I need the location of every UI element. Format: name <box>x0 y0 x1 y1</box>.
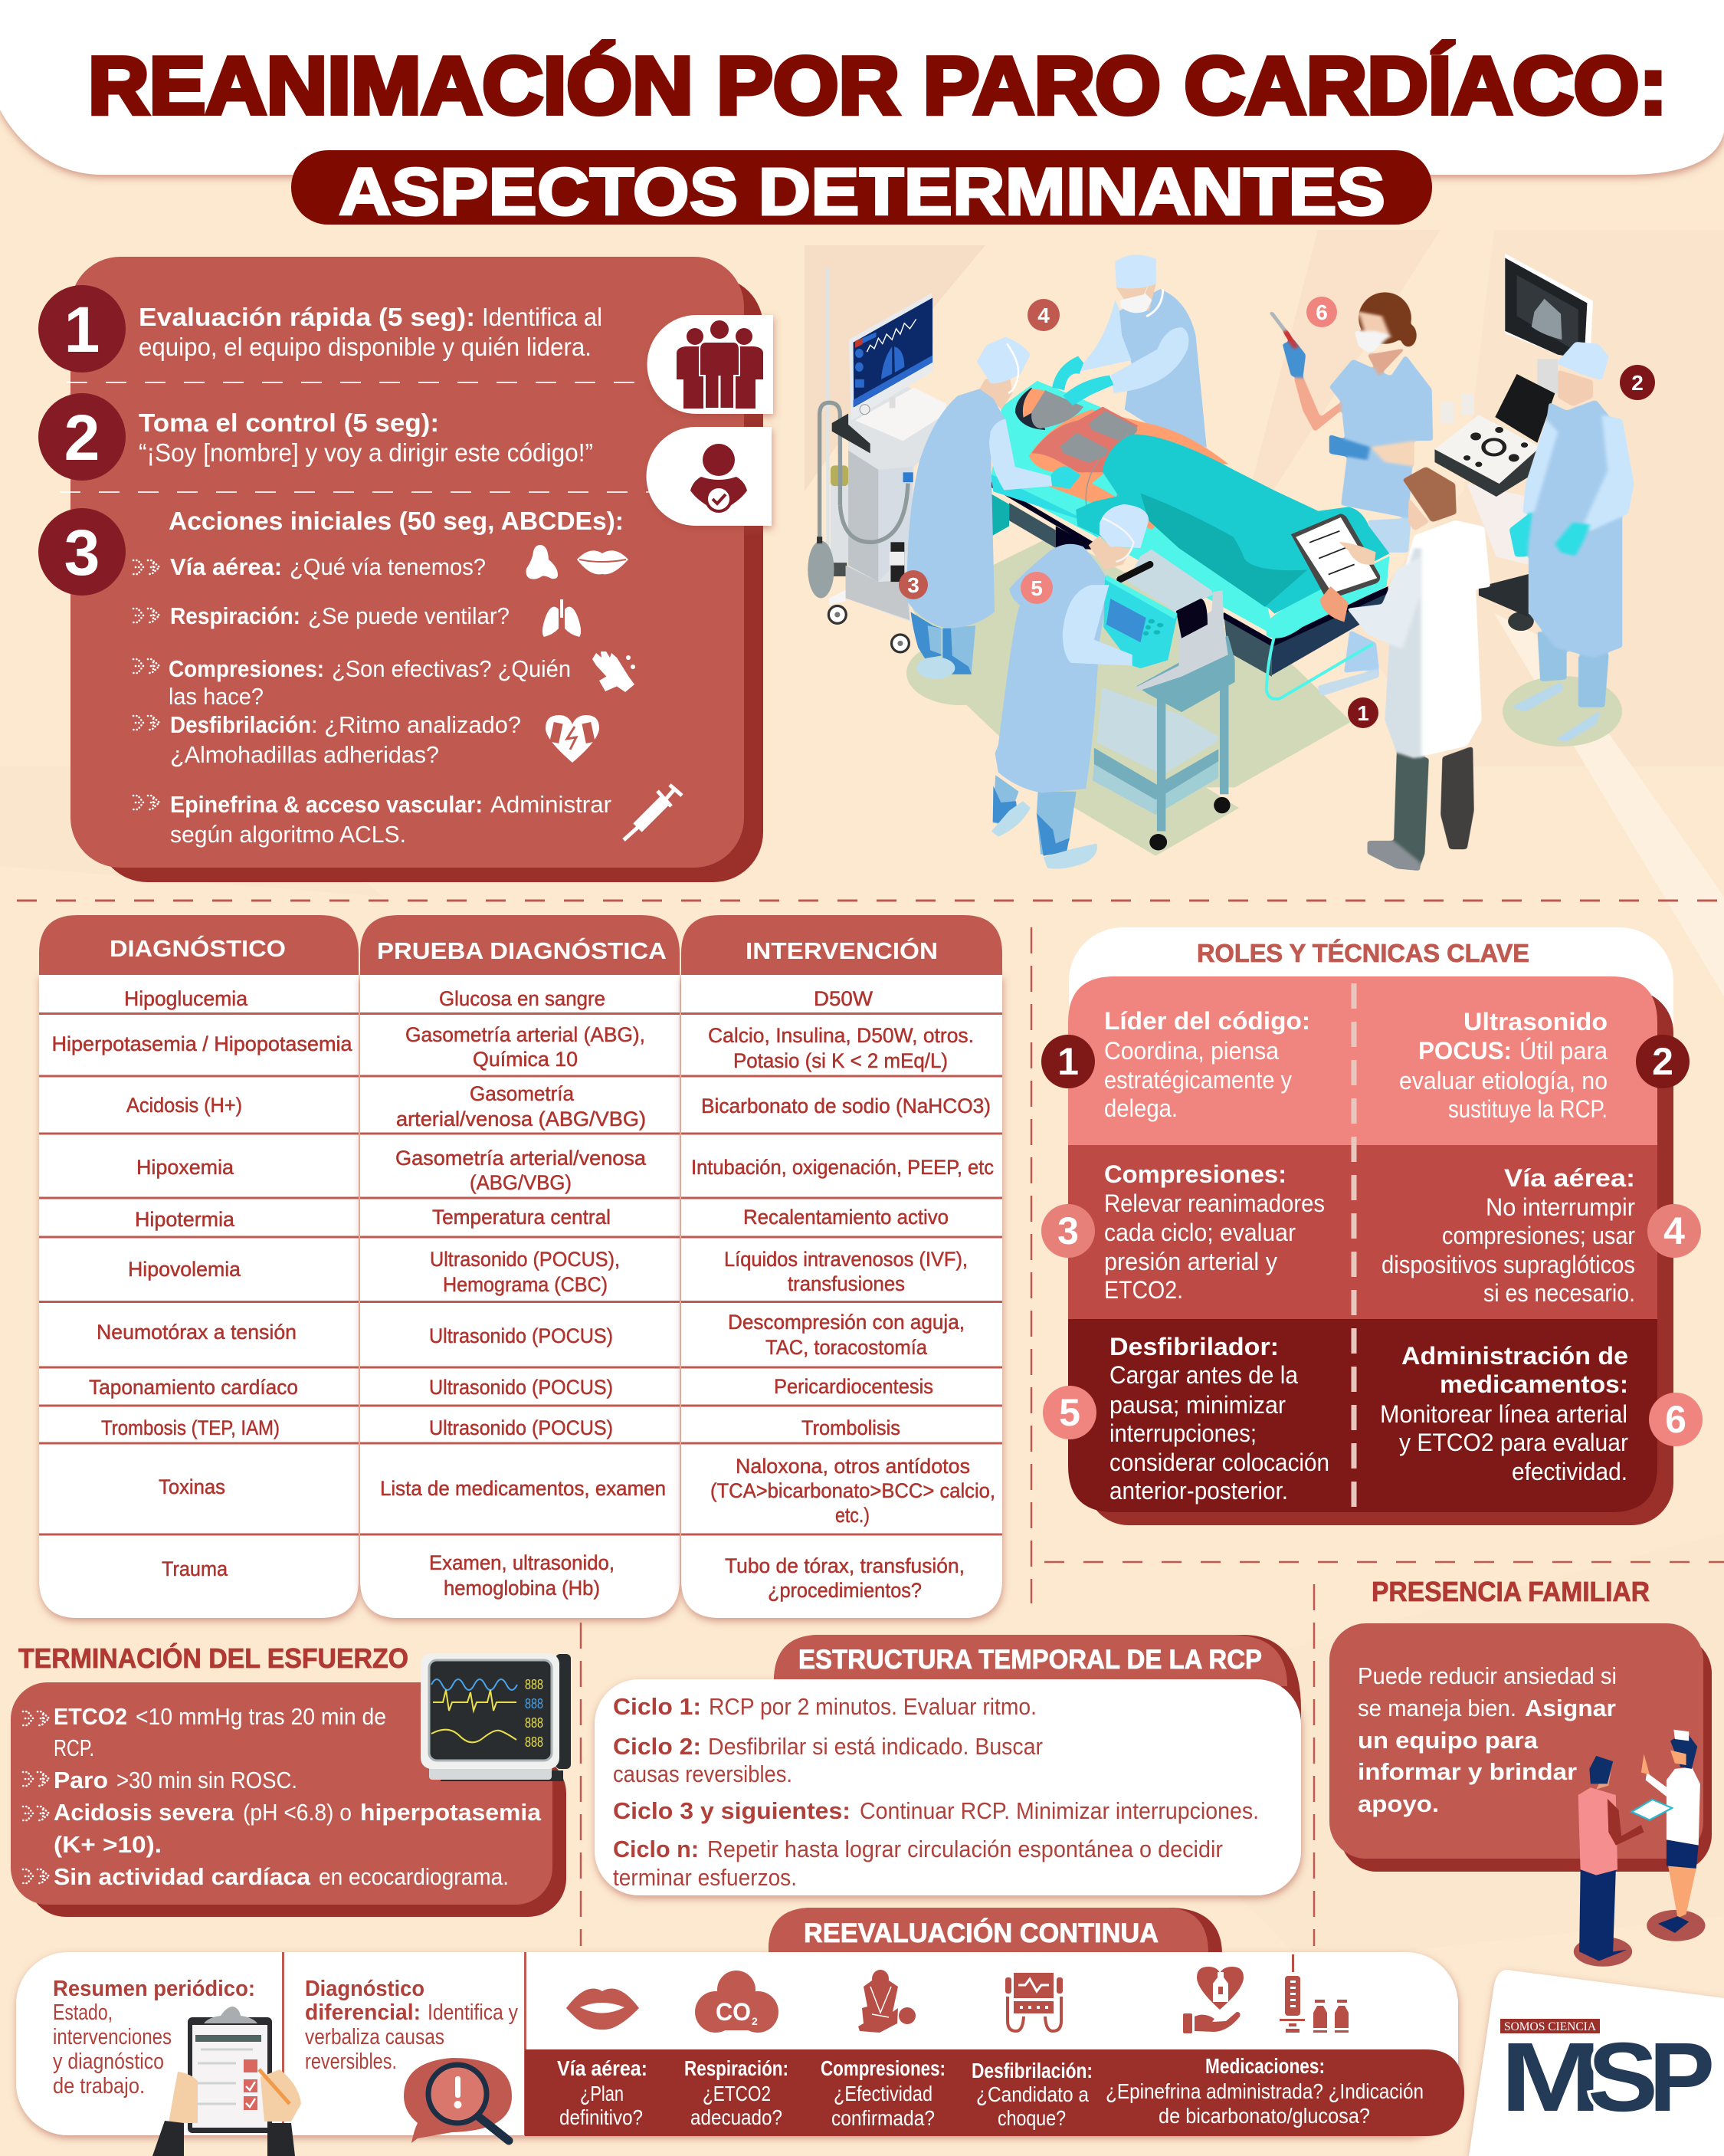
diagnóstico diferencial text: reversibles. <box>305 2049 397 2074</box>
band: compresiones: ¿Efectividad <box>834 2082 932 2105</box>
table cell text: Hipotermia <box>135 1208 235 1231</box>
cycle list: causas reversibles. <box>613 1761 792 1787</box>
table cell text: hemoglobina (Hb) <box>444 1577 600 1600</box>
band: compresiones: confirmada? <box>831 2106 935 2130</box>
termination criteria text <box>23 1703 542 1890</box>
person 4 body: airway <box>1081 254 1207 448</box>
band: vía aérea: ¿Plan <box>580 2082 624 2105</box>
table cell text: Glucosa en sangre <box>439 987 605 1010</box>
ultrasound machine <box>1434 254 1593 631</box>
table cell text: Gasometría arterial (ABG), <box>405 1023 645 1046</box>
cycle list: Repetir hasta lograr circulación espontánea o decidir <box>707 1836 1223 1862</box>
list: vía aérea: Vía aérea: <box>170 553 282 580</box>
cart shelves <box>1093 684 1231 850</box>
table cell text: Taponamiento cardíaco <box>89 1376 298 1399</box>
person 2: ultrasound <box>1509 342 1634 742</box>
step 1 badge: 1 <box>64 294 100 366</box>
band: desfibrilación: Desfibrilación: <box>972 2059 1093 2082</box>
cycle list: Ciclo n: <box>613 1836 699 1862</box>
panel: terminación del esfuerzo <box>11 1653 571 1917</box>
resumen periódico text: Resumen periódico: <box>53 1977 255 2001</box>
role 5: anterior-posterior. <box>1109 1477 1288 1505</box>
icon: CO2 cloud: CO <box>716 1998 751 2026</box>
diagnóstico diferencial text: Identifica y <box>428 2000 518 2025</box>
person 3: compressions <box>907 337 1081 679</box>
termination criteria text: >30 min sin ROSC. <box>116 1767 297 1793</box>
person 4 hands <box>1052 327 1188 405</box>
band: medicaciones: ¿Epinefrina administrada? ¿Indicación <box>1106 2079 1424 2103</box>
diagnóstico diferencial text <box>305 1977 518 2074</box>
icon: defibrillator <box>1005 1973 1063 2031</box>
table cell text: ¿procedimientos? <box>768 1579 922 1602</box>
table cell text: transfusiones <box>788 1272 905 1295</box>
illustration number badges <box>899 297 1655 728</box>
role 6: Administración de <box>1401 1342 1628 1370</box>
panel: initial steps <box>38 257 773 882</box>
role 3 <box>1041 1160 1325 1304</box>
tab: reevaluación continua <box>769 1908 1222 1954</box>
role 3: 3 <box>1057 1209 1079 1252</box>
icon: nose <box>526 545 558 579</box>
role 6: y ETCO2 para evaluar <box>1399 1429 1628 1456</box>
table cell text: Química 10 <box>473 1048 578 1071</box>
band: respiración: ¿ETCO2 <box>703 2082 771 2105</box>
role 1: 1 <box>1057 1040 1079 1083</box>
table cell text: Hipovolemia <box>128 1258 241 1281</box>
table cell text: Ultrasonido (POCUS), <box>430 1248 620 1271</box>
table cell text: Hipoxemia <box>136 1156 234 1179</box>
column: diagnóstico: DIAGNÓSTICO <box>110 934 286 962</box>
band: vía aérea: definitivo? <box>559 2105 643 2129</box>
role 4: si es necesario. <box>1483 1279 1635 1307</box>
icon: lungs <box>542 599 581 637</box>
table cell text: Bicarbonato de sodio (NaHCO3) <box>701 1094 991 1117</box>
step 2 text: “¡Soy [nombre] y voy a dirigir este código!” <box>139 438 593 467</box>
list: epinefrina: Administrar <box>490 791 611 818</box>
table cell text: Naloxona, otros antídotos <box>736 1455 970 1478</box>
icon: team tab <box>647 315 773 414</box>
cycle list: Ciclo 1: <box>613 1693 701 1720</box>
person 5 gown <box>995 544 1109 793</box>
band: medicaciones: de bicarbonato/glucosa? <box>1159 2104 1370 2128</box>
list: compresiones: las hace? <box>169 683 264 710</box>
illustration: doctor and relative <box>1574 1730 1705 1967</box>
list: epinefrina <box>133 791 611 848</box>
table cell text: Lista de medicamentos, examen <box>380 1477 666 1500</box>
table cell text: Recalentamiento activo <box>743 1206 949 1229</box>
role 4: 4 <box>1663 1209 1685 1252</box>
role 6: medicamentos: <box>1440 1370 1628 1398</box>
table cell text: Potasio (si K < 2 mEq/L) <box>733 1049 948 1072</box>
termination criteria text: hiperpotasemia <box>360 1799 542 1826</box>
list: desfibrilación <box>133 711 521 768</box>
column: intervención <box>681 915 1002 1618</box>
role 2: 2 <box>1652 1040 1673 1083</box>
step 1 badge <box>38 285 126 372</box>
ventilator machine <box>808 268 947 652</box>
column: prueba diagnóstica <box>360 915 680 1618</box>
table cell text: Trauma <box>162 1557 228 1580</box>
table cell text: Pericardiocentesis <box>774 1375 933 1398</box>
role 5: pausa; minimizar <box>1109 1391 1286 1419</box>
icon: CO2 cloud: 2 <box>752 2015 758 2027</box>
band: desfibrilación <box>972 2059 1093 2130</box>
table cell text: Intubación, oxigenación, PEEP, etc <box>691 1156 994 1179</box>
list: respiración: Respiración: <box>170 602 300 629</box>
icon: patient monitor: 888 <box>525 1696 543 1711</box>
list: compresiones: ¿Son efectivas? ¿Quién <box>332 655 571 682</box>
person 5 and defibrillator cart <box>991 504 1235 869</box>
list: vía aérea <box>133 553 486 580</box>
presencia text: informar y brindar <box>1358 1758 1577 1785</box>
person 1: team leader <box>1347 467 1490 871</box>
table cell text: Descompresión con aguja, <box>728 1311 965 1334</box>
role 4: compresiones; usar <box>1442 1222 1635 1249</box>
table cell text: Ultrasonido (POCUS) <box>429 1324 613 1347</box>
table cell text: Neumotórax a tensión <box>97 1321 297 1344</box>
termination criteria text: (pH <6.8) o <box>243 1799 352 1826</box>
logo wordmark: M <box>1500 2023 1601 2132</box>
presencia text: un equipo para <box>1358 1727 1539 1754</box>
cycle list: Ciclo 3 y siguientes: <box>613 1797 851 1824</box>
step 2 badge: 2 <box>64 402 100 474</box>
table cell text: (ABG/VBG) <box>470 1171 572 1194</box>
role 1: delega. <box>1104 1094 1178 1122</box>
diagnóstico diferencial text: verbaliza causas <box>305 2025 444 2049</box>
role 1: Coordina, piensa <box>1104 1037 1279 1065</box>
role 5: Desfibrilador: <box>1109 1333 1279 1360</box>
illustration number badges: 5 <box>1031 576 1043 600</box>
role 4: dispositivos supraglóticos <box>1381 1251 1635 1278</box>
role 2: Ultrasonido <box>1463 1008 1608 1035</box>
table cell text: Acidosis (H+) <box>126 1094 242 1117</box>
list: respiración <box>133 602 510 629</box>
termination criteria text: RCP. <box>54 1734 94 1761</box>
presencia text <box>1358 1662 1617 1817</box>
structure heading: ESTRUCTURA TEMPORAL DE LA RCP <box>798 1645 1262 1675</box>
list: desfibrilación: Desfibrilación <box>170 711 311 738</box>
presencia text: Puede reducir ansiedad si <box>1358 1662 1617 1689</box>
title: REANIMACIÓN POR PARO CARDÍACO: <box>88 41 1667 131</box>
table cell text: Examen, ultrasonido, <box>429 1551 615 1574</box>
role 4: No interrumpir <box>1486 1193 1635 1221</box>
table cell text: (TCA>bicarbonato>BCC> calcio, <box>710 1479 995 1502</box>
step 2 text <box>139 409 593 467</box>
role 4: Vía aérea: <box>1504 1164 1635 1192</box>
diagnóstico diferencial text: Diagnóstico <box>305 1977 424 2001</box>
cycle list <box>613 1693 1259 1891</box>
hospital bed <box>990 381 1389 699</box>
list: compresiones <box>133 655 571 710</box>
table cell text: Toxinas <box>159 1475 225 1498</box>
illustration number badges: 1 <box>1357 701 1369 725</box>
band: respiración <box>684 2056 788 2129</box>
step 3 heading: Acciones iniciales (50 seg, ABCDEs): <box>169 507 624 535</box>
icon: magnifier speech bubble <box>404 2058 512 2143</box>
icon: lips <box>566 1988 639 2030</box>
icon: heart with pads <box>546 715 599 763</box>
band: desfibrilación: choque? <box>998 2106 1066 2130</box>
tab: reevaluación continua: REEVALUACIÓN CONTINUA <box>804 1918 1159 1948</box>
logo tag: SOMOS CIENCIA <box>1504 2020 1596 2033</box>
resumen periódico text <box>53 1977 255 2099</box>
role 1: estratégicamente y <box>1104 1066 1292 1094</box>
presencia heading: PRESENCIA FAMILIAR <box>1372 1576 1650 1607</box>
band: medicaciones <box>1106 2054 1424 2128</box>
role 3: presión arterial y <box>1104 1248 1277 1275</box>
step 3 badge: 3 <box>64 517 100 589</box>
table cell text: Tubo de tórax, transfusión, <box>725 1554 965 1577</box>
list: desfibrilación: : ¿Ritmo analizado? <box>311 711 521 738</box>
termination criteria text: ETCO2 <box>54 1703 127 1730</box>
table cell text: arterial/venosa (ABG/VBG) <box>396 1108 646 1131</box>
table cell text: Calcio, Insulina, D50W, otros. <box>708 1024 974 1047</box>
defibrillator front panel <box>1103 575 1178 668</box>
panel: estructura temporal de la RCP <box>595 1635 1301 1895</box>
cycle list: Ciclo 2: <box>613 1733 701 1760</box>
role 3: cada ciclo; evaluar <box>1104 1219 1296 1246</box>
icon: medication heart and hand <box>1183 1967 1244 2033</box>
icon: patient monitor: 888 <box>525 1677 543 1692</box>
termination criteria text: en ecocardiograma. <box>319 1863 509 1890</box>
icon: patient monitor: 888 <box>525 1734 543 1750</box>
role 3: Compresiones: <box>1104 1160 1286 1188</box>
termination criteria text: Paro <box>54 1767 108 1793</box>
band: vía aérea: Vía aérea: <box>557 2056 647 2080</box>
role 6: 6 <box>1665 1398 1686 1441</box>
table: diagnosis, test, intervention <box>39 915 1002 1618</box>
clipboard and hands <box>1291 514 1380 622</box>
column: intervención: INTERVENCIÓN <box>746 937 938 964</box>
table cell text: Hiperpotasemia / Hipopotasemia <box>52 1032 352 1055</box>
table cell text: Trombolisis <box>801 1416 900 1439</box>
list: epinefrina: Epinefrina & acceso vascular: <box>170 791 483 818</box>
teal cover sheet <box>1076 434 1389 614</box>
termination criteria text: <10 mmHg tras 20 min de <box>136 1703 386 1730</box>
patient <box>1015 388 1228 534</box>
role 5: Cargar antes de la <box>1109 1361 1298 1389</box>
table cell text: Ultrasonido (POCUS) <box>429 1416 613 1439</box>
cycle list: terminar esfuerzos. <box>613 1864 797 1891</box>
table cell text: TAC, toracostomía <box>765 1336 928 1359</box>
diagnóstico diferencial text: diferencial: <box>305 2000 421 2025</box>
band: compresiones: Compresiones: <box>821 2056 946 2080</box>
cycle list: Desfibrilar si está indicado. Buscar <box>708 1733 1043 1760</box>
header banner <box>0 0 1724 175</box>
step 1 text <box>139 303 602 361</box>
role 3: Relevar reanimadores <box>1104 1190 1325 1217</box>
role 6 <box>1380 1342 1703 1485</box>
list: respiración: ¿Se puede ventilar? <box>308 602 510 629</box>
role 4 <box>1381 1164 1701 1307</box>
illustration: resuscitation team <box>805 245 1634 871</box>
panel: presencia familiar <box>1329 1576 1712 1967</box>
presencia text: se maneja bien. <box>1358 1695 1516 1721</box>
icon: leader tab <box>647 427 772 526</box>
role 5: interrupciones; <box>1109 1419 1257 1447</box>
role 5 <box>1043 1333 1329 1505</box>
logo wordmark: S <box>1588 2023 1658 2132</box>
presencia text: Asignar <box>1525 1695 1616 1721</box>
illustration number badges: 6 <box>1316 300 1328 324</box>
role 6: Monitorear línea arterial <box>1380 1400 1627 1428</box>
resumen periódico text: Estado, <box>53 2000 113 2025</box>
role 2: POCUS: <box>1418 1037 1512 1065</box>
table cell text: D50W <box>814 987 873 1010</box>
subtitle pill: ASPECTOS DETERMINANTES <box>339 155 1385 229</box>
background shade and floor mat <box>805 245 1622 856</box>
icon: CPR <box>858 1970 916 2033</box>
list: epinefrina: según algoritmo ACLS. <box>170 821 406 848</box>
band: desfibrilación: ¿Candidato a <box>976 2082 1089 2106</box>
termination criteria text: Sin actividad cardíaca <box>54 1863 311 1890</box>
presencia text: apoyo. <box>1358 1790 1439 1817</box>
table cell text: Hemograma (CBC) <box>443 1273 608 1296</box>
illustration number badges: 3 <box>907 573 919 597</box>
table cell text: Trombosis (TEP, IAM) <box>101 1416 280 1439</box>
logo corner <box>1469 1970 1724 2156</box>
band: vía aérea <box>557 2056 647 2129</box>
role 6: efectividad. <box>1512 1458 1627 1485</box>
illustration number badges: 4 <box>1037 304 1050 327</box>
band: compresiones <box>821 2056 946 2130</box>
table cell text: Gasometría arterial/venosa <box>395 1147 647 1170</box>
icon: CO2 cloud <box>695 1971 778 2033</box>
column: diagnóstico <box>39 915 359 1618</box>
list: desfibrilación: ¿Almohadillas adheridas? <box>170 741 439 768</box>
termination criteria text: Acidosis severa <box>54 1799 234 1826</box>
resumen periódico text: intervenciones <box>53 2025 172 2049</box>
step 3 badge <box>38 508 126 596</box>
table cell text: Gasometría <box>470 1082 575 1105</box>
roles heading: ROLES Y TÉCNICAS CLAVE <box>1197 939 1529 967</box>
resumen periódico text: y diagnóstico <box>53 2049 164 2074</box>
defibrillator <box>1120 550 1235 712</box>
person 5 legs <box>991 775 1097 869</box>
termination criteria text: (K+ >10). <box>54 1831 162 1858</box>
table cell text: Temperatura central <box>432 1206 611 1229</box>
panel: bottom review bar <box>16 1952 1464 2156</box>
heading: terminación del esfuerzo: TERMINACIÓN DEL ESFUERZO <box>18 1642 408 1674</box>
list: compresiones: Compresiones: <box>169 655 324 682</box>
icon: syringe <box>624 785 682 840</box>
table cell text: etc.) <box>835 1504 870 1527</box>
step 2 text: Toma el control (5 seg): <box>139 409 439 437</box>
band: respiración: adecuado? <box>690 2105 782 2129</box>
role 2 <box>1399 1008 1690 1123</box>
role 5: 5 <box>1059 1391 1080 1434</box>
resumen periódico text: de trabajo. <box>53 2074 145 2099</box>
icon: syringe and vials <box>1280 1954 1349 2033</box>
logo wordmark: P <box>1649 2023 1715 2132</box>
panel: roles y técnicas clave <box>1041 927 1703 1525</box>
table cell text: Líquidos intravenosos (IVF), <box>724 1248 968 1271</box>
icon: patient monitor: 888 <box>525 1715 543 1731</box>
band: medicaciones: Medicaciones: <box>1205 2054 1325 2078</box>
icon: lips <box>577 550 628 574</box>
step 2 badge <box>38 393 126 481</box>
role 1 <box>1041 1007 1310 1122</box>
table cell text: Hipoglucemia <box>124 987 248 1010</box>
role 2: sustituye la RCP. <box>1448 1095 1608 1123</box>
table cell text <box>52 987 995 1602</box>
role 2: Útil para <box>1519 1037 1608 1065</box>
step 1 text: Identifica al <box>482 303 602 331</box>
cycle list: RCP por 2 minutos. Evaluar ritmo. <box>709 1693 1037 1720</box>
band: respiración: Respiración: <box>684 2056 788 2080</box>
icon: clipboard with hands <box>152 2007 301 2156</box>
step 1 text: equipo, el equipo disponible y quién lidera. <box>139 333 592 361</box>
icon: hands <box>592 651 635 692</box>
role 5: considerar colocación <box>1109 1449 1329 1476</box>
table cell text: Ultrasonido (POCUS) <box>429 1376 613 1399</box>
role 1: Líder del código: <box>1104 1007 1310 1035</box>
logo wordmark <box>1500 2023 1715 2132</box>
role 3: ETCO2. <box>1104 1276 1183 1304</box>
role 2: evaluar etiología, no <box>1399 1067 1608 1094</box>
column: prueba diagnóstica: PRUEBA DIAGNÓSTICA <box>377 937 667 964</box>
step 1 text: Evaluación rápida (5 seg): <box>139 303 475 331</box>
cycle list: Continuar RCP. Minimizar interrupciones. <box>860 1797 1259 1824</box>
illustration number badges: 2 <box>1631 371 1644 395</box>
icon: patient monitor <box>421 1653 571 1781</box>
person 6: medications <box>1270 292 1433 697</box>
list: vía aérea: ¿Qué vía tenemos? <box>290 553 486 580</box>
